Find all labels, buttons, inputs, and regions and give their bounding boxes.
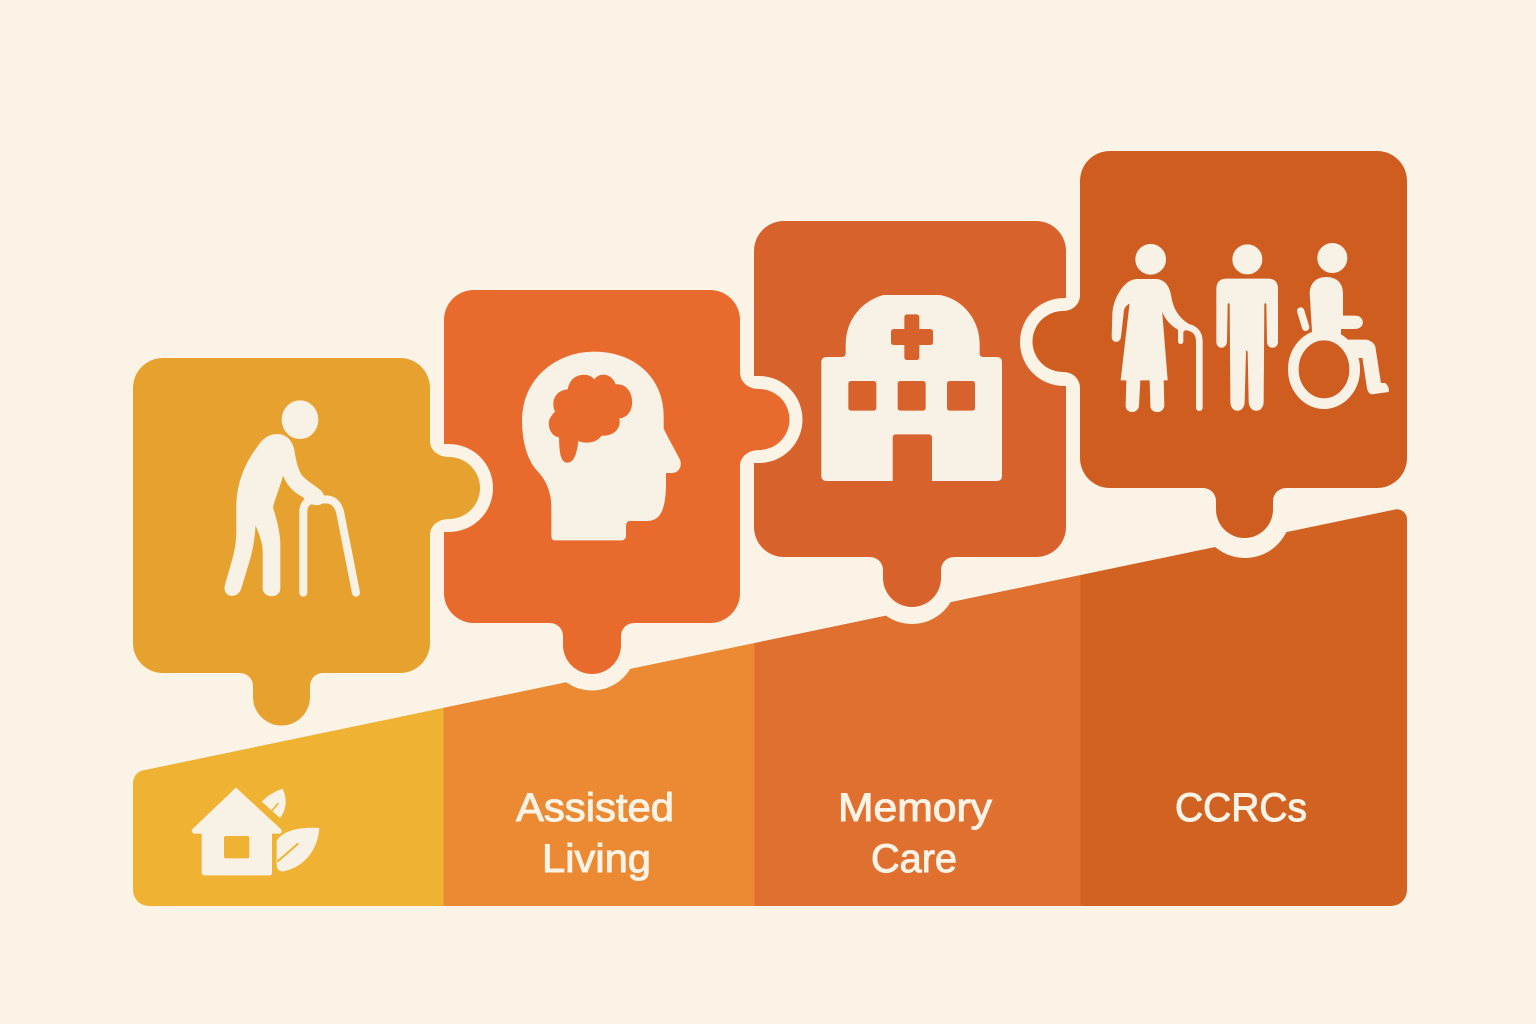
icon: hospital building [822,295,1002,481]
label: Assisted Living: Living [542,837,651,881]
icon: house with leaves [192,788,319,875]
label: Memory Care [838,786,992,881]
label: Assisted Living: Assisted [516,786,674,830]
icon: older person with walker [225,401,356,596]
label: Assisted Living [516,786,674,881]
figure: woman with cane [1112,244,1199,412]
rising base staircase [133,509,1407,906]
base segment: CCRCs [1080,500,1408,910]
label: Memory Care: Memory [838,786,992,830]
puzzle piece 4: deep orange [1032,151,1407,538]
base segment: home care [133,708,444,906]
puzzle piece 2: orange [444,290,789,674]
tab cut-out: CCRCs [1199,466,1291,558]
label: Memory Care: Care [871,837,957,881]
puzzle piece 3: burnt orange [754,221,1066,607]
figure: person in wheelchair [1293,243,1389,404]
figure: man standing [1217,245,1278,410]
base segment: assisted living [444,643,754,906]
tab cut-out: assisted living [548,602,636,690]
label: CCRCs: CCRCs [1175,786,1307,830]
icon: head with brain [522,352,680,540]
icon: group of three residents [1112,243,1389,412]
tab cut-out: memory care [867,534,957,624]
base segment: memory care [754,575,1080,906]
puzzle piece 1: amber [133,358,480,726]
